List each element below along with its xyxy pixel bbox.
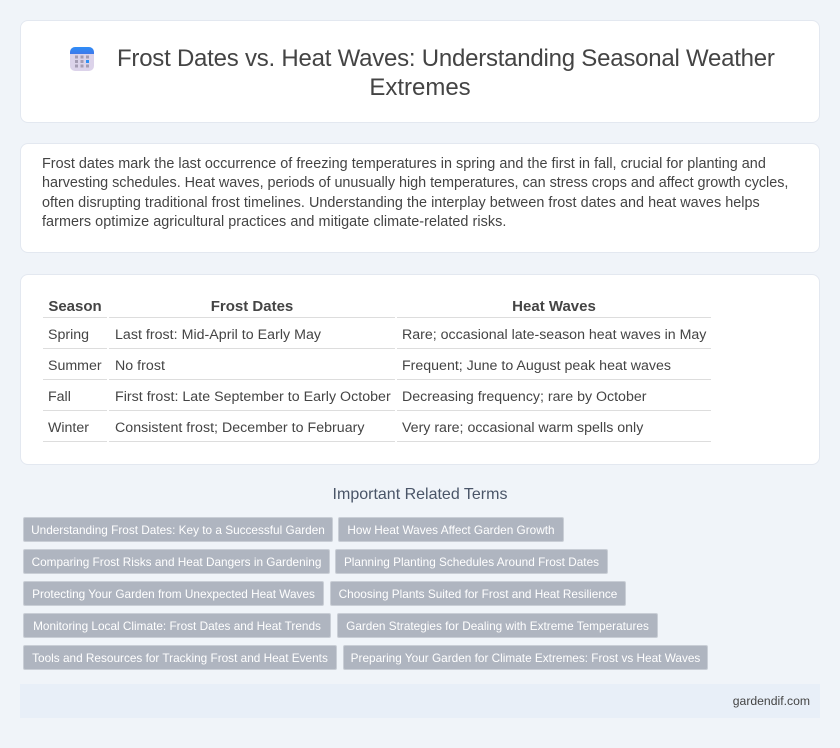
comparison table: Very rare; occasional warm spells only	[402, 420, 643, 436]
description text: Frost dates mark the last occurrence of freezing temperatures in spring and the first in fall, crucial for planting and	[42, 156, 766, 172]
tag	[23, 581, 324, 606]
tag	[330, 581, 626, 606]
comparison table: Consistent frost; December to February	[115, 420, 365, 436]
table panel	[20, 274, 820, 465]
description panel	[20, 143, 820, 253]
tag	[343, 645, 708, 670]
tag	[23, 645, 337, 670]
comparison table: Season	[48, 298, 102, 315]
title	[117, 45, 775, 101]
comparison table: Frequent; June to August peak heat waves	[402, 358, 671, 374]
tag	[23, 517, 333, 542]
tag: Garden Strategies for Dealing with Extreme Temperatures	[346, 619, 649, 633]
comparison table: No frost	[115, 358, 165, 374]
tag: How Heat Waves Affect Garden Growth	[347, 523, 555, 537]
tag: Protecting Your Garden from Unexpected Heat Waves	[32, 587, 315, 601]
tag	[338, 517, 564, 542]
comparison table	[43, 298, 711, 442]
tag: Choosing Plants Suited for Frost and Heat Resilience	[339, 587, 617, 601]
description text: often disrupting traditional frost timelines. Understanding the interplay between frost dates and heat waves helps	[42, 195, 760, 211]
tag: Preparing Your Garden for Climate Extremes: Frost vs Heat Waves	[351, 651, 700, 665]
comparison table: First frost: Late September to Early October	[115, 389, 391, 405]
footer source text: gardendif.com	[733, 694, 810, 708]
footer bar	[20, 684, 820, 718]
tag	[23, 549, 330, 574]
tag	[23, 613, 331, 638]
comparison table: Rare; occasional late-season heat waves in May	[402, 327, 706, 343]
comparison table: Summer	[48, 358, 102, 374]
comparison table: Last frost: Mid-April to Early May	[115, 327, 321, 343]
description text	[42, 156, 788, 230]
comparison table: Spring	[48, 327, 89, 343]
comparison table: Decreasing frequency; rare by October	[402, 389, 646, 405]
comparison table: Frost Dates	[211, 298, 293, 315]
comparison table: Heat Waves	[512, 298, 596, 315]
tag	[335, 549, 608, 574]
comparison table: Fall	[48, 389, 71, 405]
title: Extremes	[369, 74, 471, 101]
tag: Monitoring Local Climate: Frost Dates and Heat Trends	[33, 619, 321, 633]
related terms tags	[23, 517, 708, 670]
title: Frost Dates vs. Heat Waves: Understanding Seasonal Weather	[117, 45, 775, 72]
related terms heading: Important Related Terms	[333, 486, 507, 503]
header panel	[20, 20, 820, 123]
tag	[337, 613, 658, 638]
tag: Comparing Frost Risks and Heat Dangers in Gardening	[32, 555, 321, 569]
description text: harvesting schedules. Heat waves, periods of unusually high temperatures, can stress crops and affect growth cycles,	[42, 175, 788, 191]
description text: farmers optimize agricultural practices and mitigate climate-related risks.	[42, 214, 506, 230]
icon: calendar	[70, 47, 94, 71]
tag: Understanding Frost Dates: Key to a Successful Garden	[31, 523, 325, 537]
tag: Planning Planting Schedules Around Frost Dates	[344, 555, 599, 569]
tag: Tools and Resources for Tracking Frost and Heat Events	[32, 651, 328, 665]
comparison table: Winter	[48, 420, 89, 436]
